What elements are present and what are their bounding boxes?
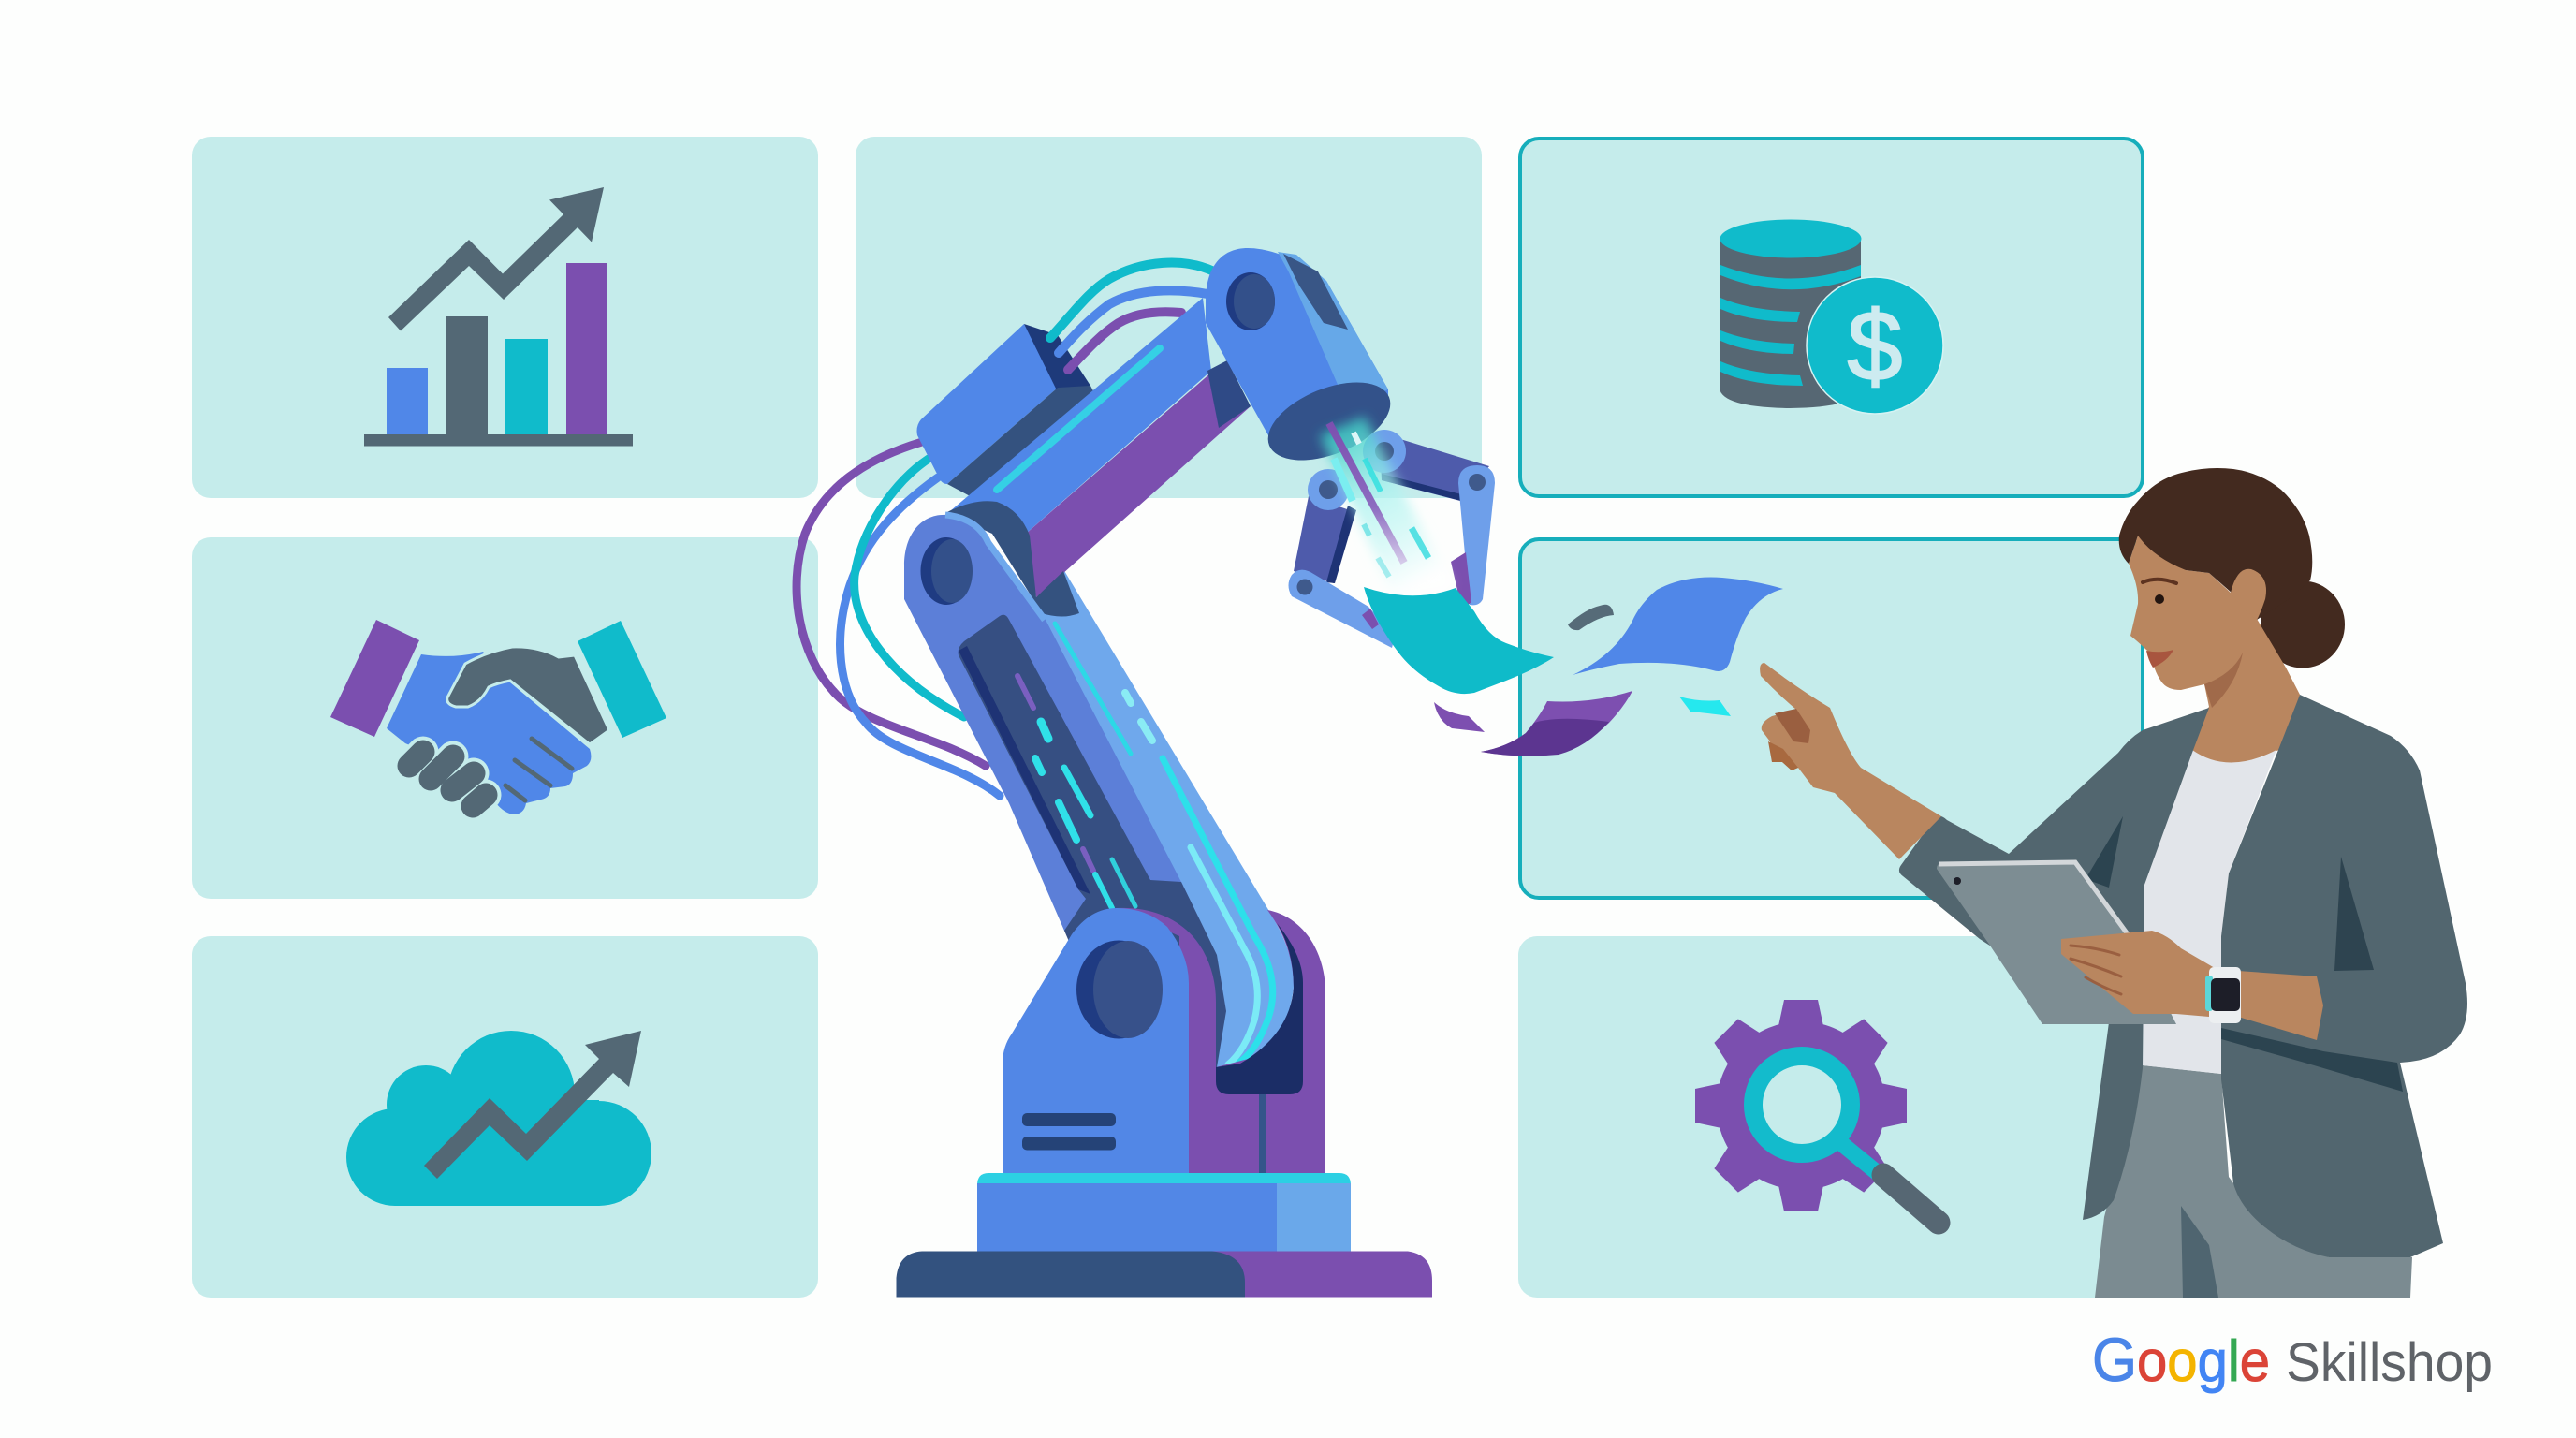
- right finger: [1458, 465, 1495, 605]
- paper: small purple: [1434, 702, 1485, 732]
- logo: Google Skillshop: [2092, 1325, 2493, 1394]
- scanning beam: [1320, 417, 1451, 594]
- watch: [2205, 967, 2241, 1023]
- foot: [897, 1251, 1432, 1298]
- panel: growth chart: [192, 137, 818, 498]
- holding hand: [2061, 931, 2215, 1017]
- hair: [2119, 468, 2312, 620]
- paper: teal: [1364, 587, 1554, 694]
- vents: [1022, 1113, 1116, 1126]
- icon: cloud with rising arrow: [346, 1031, 651, 1206]
- ear: [2231, 569, 2266, 620]
- shoulder joint hole: [921, 537, 972, 605]
- panel: settings search: [1518, 936, 2144, 1298]
- paper: blue: [1573, 578, 1783, 675]
- gripper: [1288, 417, 1495, 648]
- paper: grey scrap: [1568, 605, 1614, 630]
- base side strip: [1117, 908, 1216, 1173]
- cable box: [917, 324, 1097, 498]
- top cables: [1050, 263, 1214, 370]
- blazer: [1899, 695, 2467, 1257]
- blazer shadows: [2086, 816, 2123, 888]
- joints: [1308, 469, 1349, 510]
- plinth: [977, 1173, 1351, 1252]
- trousers: [2095, 1065, 2412, 1298]
- icon: handshake: [330, 620, 666, 814]
- forearm: [2238, 971, 2323, 1040]
- panel: centre top: [856, 137, 1482, 498]
- glowing streaks: [1017, 624, 1273, 1064]
- paper: cyan scrap: [1679, 697, 1731, 716]
- logo: Google Skillshop: Skillshop: [2286, 1332, 2493, 1393]
- paper: large purple: [1481, 691, 1632, 756]
- panel: handshake: [192, 537, 818, 899]
- elbow link: [1206, 248, 1401, 476]
- panel: cloud growth: [192, 936, 818, 1298]
- left cables: [797, 442, 1000, 796]
- icon: coin stack with dollar: [1720, 219, 1943, 414]
- neck and face: [2129, 536, 2312, 770]
- flying papers: [1364, 578, 1783, 756]
- woman with tablet: [1760, 468, 2467, 1298]
- pointing arm and hand: [1760, 663, 1941, 859]
- base pillar: [1003, 908, 1189, 1173]
- panel: highlighted middle right: [1520, 539, 2143, 898]
- dark control panel: [959, 615, 1226, 1067]
- eye, brow, lips: [2155, 594, 2164, 604]
- lower arm link: [904, 515, 1273, 1067]
- panel: revenue: [1520, 139, 2143, 496]
- icon: gear with magnifying glass: [1695, 1000, 1939, 1223]
- upper arm: [945, 298, 1251, 616]
- icon: bar chart with rising arrow: [364, 187, 633, 446]
- lower left finger: [1288, 570, 1395, 648]
- white shirt: [2143, 750, 2276, 1074]
- tablet: [1937, 862, 2176, 1024]
- lower arm light band: [1042, 569, 1294, 1067]
- logo: Google Skillshop: Google: [2092, 1325, 2270, 1394]
- robot arm: [797, 248, 1495, 1298]
- hair bun: [2261, 580, 2345, 668]
- neck shadow: [2204, 653, 2243, 708]
- icon: coin stack with dollar: $: [1848, 291, 1902, 402]
- base post back: [1216, 910, 1325, 1173]
